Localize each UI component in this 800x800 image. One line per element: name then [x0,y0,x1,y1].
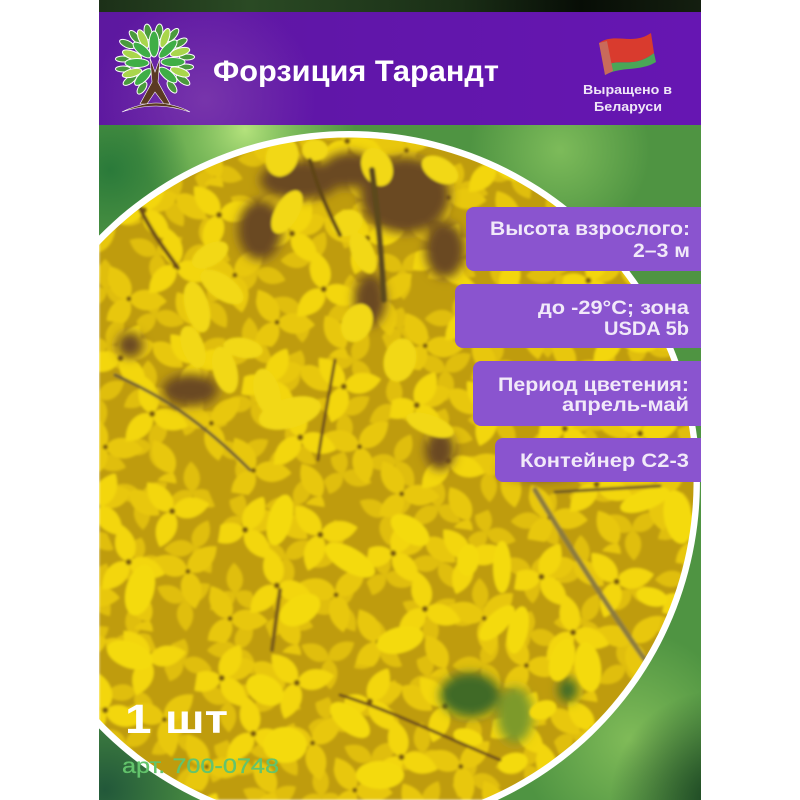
white circular photo ring [99,131,700,800]
info pill: height [466,207,701,271]
tree ground [122,103,190,112]
info pill: flowering period: апрель-май [562,394,689,416]
large bright petals lower [103,482,696,789]
photo card background: blurred green foliage [99,0,701,800]
infographic canvas [99,0,701,800]
green gap [440,673,578,743]
info pill: height: 2–3 м [633,240,690,262]
tree leaves [116,23,194,96]
info pill: container [495,438,701,482]
header band [99,12,701,125]
info pill: hardiness: USDA 5b [604,318,689,340]
top dark strip [99,0,701,12]
icon: Belarus flag [599,33,656,75]
brown gaps between branches [117,152,580,480]
label: grown in Belarus [583,83,672,114]
title: Форзиция Тарандт [213,55,499,88]
circular forsythia flower photo [99,125,701,800]
quantity: 1 шт [125,696,228,742]
label: grown in Belarus: Выращено в [583,83,672,97]
info pill: hardiness [455,284,701,348]
info pill: container: Контейнер С2-3 [520,450,689,472]
info pill: height: Высота взрослого: [490,218,690,240]
flower texture [99,125,701,800]
article number: арт. 700-0748 [122,754,279,778]
info pill: flowering period: Период цветения: [498,374,689,396]
info pill: hardiness: до -29°C; зона [538,297,689,319]
branches [115,160,660,760]
info pill: flowering period [473,361,701,426]
tree trunk [140,58,170,104]
logo: tree [116,23,194,112]
label: grown in Belarus: Беларуси [594,100,662,114]
large bright petals upper [175,133,463,443]
